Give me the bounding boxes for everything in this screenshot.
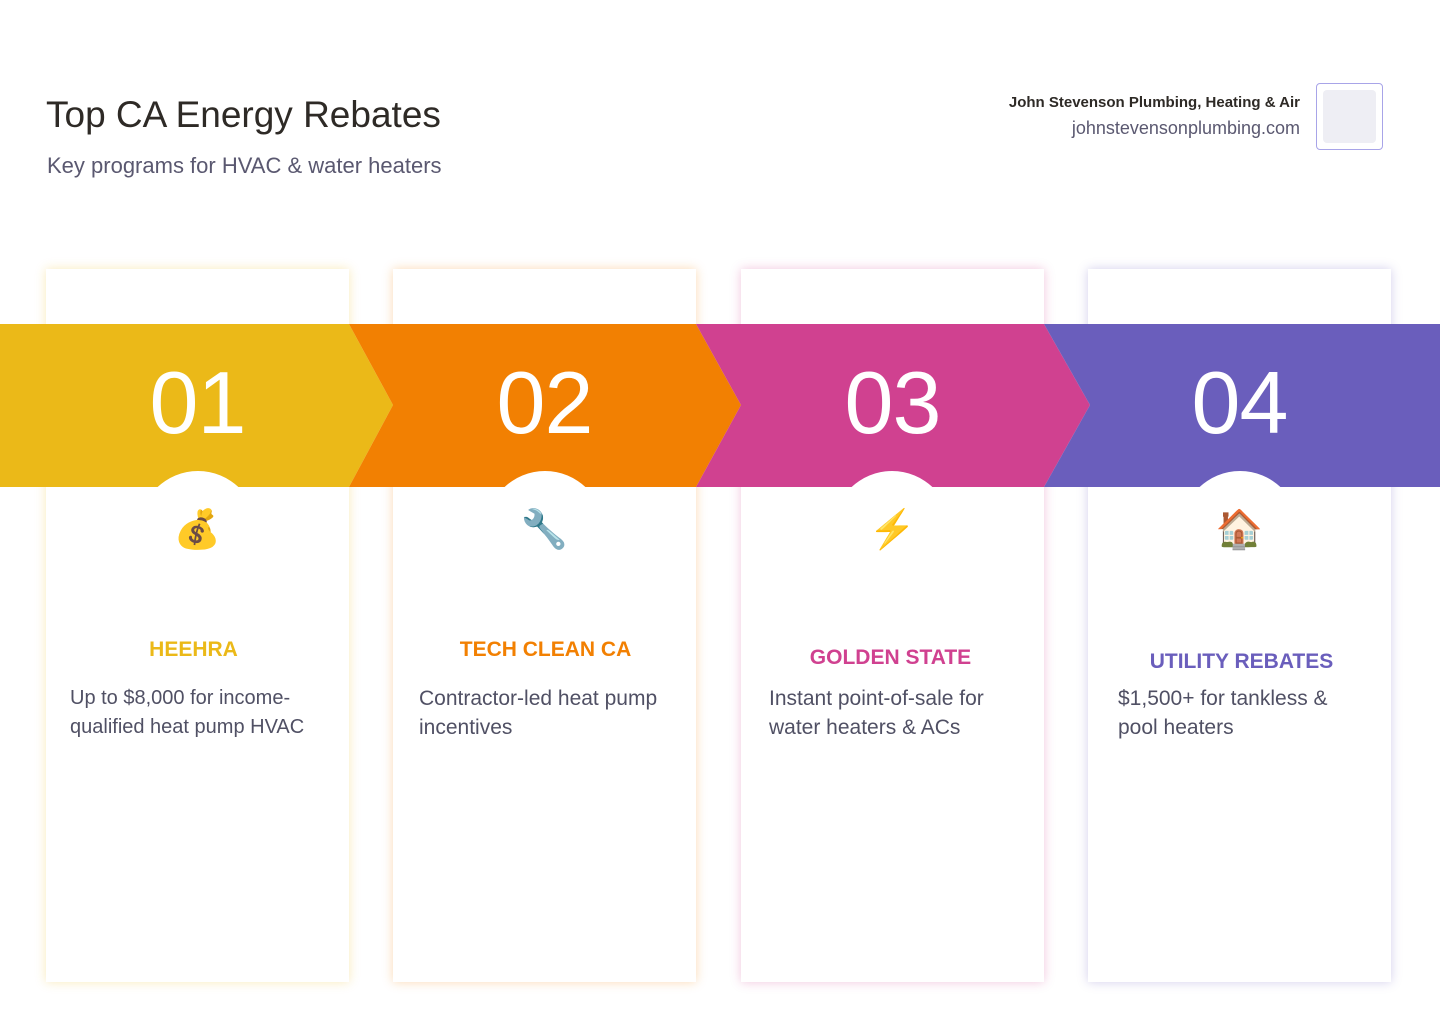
brand block [1009, 94, 1300, 138]
card 1 [46, 269, 349, 982]
number 02: 02 [497, 353, 592, 452]
text 1: Up to $8,000 for income-qualified heat pump HVAC [70, 687, 304, 738]
heading 2: TECH CLEAN CA [460, 638, 631, 661]
subtitle: Key programs for HVAC & water heaters [47, 153, 442, 178]
icon: money bag: 💰 [174, 509, 221, 551]
number 04: 04 [1192, 353, 1287, 452]
icon: house: 🏠 [1216, 509, 1263, 551]
title: Top CA Energy Rebates [46, 94, 441, 135]
card 3 [741, 269, 1044, 982]
arrow band [0, 324, 1440, 487]
text 2: Contractor-led heat pump incentives [419, 687, 657, 739]
icon: wrench: 🔧 [521, 509, 568, 551]
card 4 [1088, 269, 1391, 982]
card 2 [393, 269, 696, 982]
number 01: 01 [150, 353, 245, 452]
icon: lightning: ⚡ [869, 509, 916, 551]
heading 1: HEEHRA [149, 638, 238, 661]
number 03: 03 [845, 353, 940, 452]
brand block: John Stevenson Plumbing, Heating & Air [1009, 94, 1300, 111]
text 4: $1,500+ for tankless & pool heaters [1118, 687, 1328, 739]
text 3: Instant point-of-sale for water heaters & ACs [769, 687, 984, 739]
heading 4: UTILITY REBATES [1150, 650, 1333, 673]
brand block: johnstevensonplumbing.com [1072, 118, 1300, 138]
heading 3: GOLDEN STATE [810, 646, 971, 669]
logo box [1316, 83, 1383, 150]
